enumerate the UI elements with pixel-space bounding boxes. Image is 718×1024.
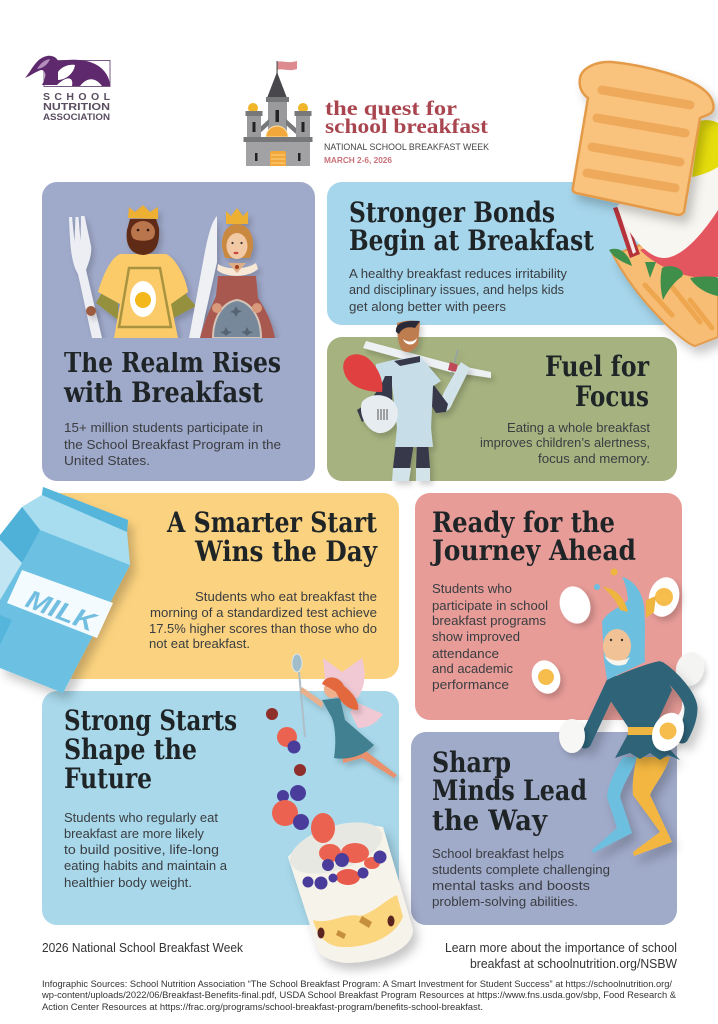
footer: sources: Infographic Sources: School Nutrition Association “The School Breakfast Program: A Smart Investment for Student Success” at https://schoolnutrition.org/: [42, 979, 672, 990]
illustration: king and queen with fork and knife: [60, 205, 282, 352]
text: smarter body: [149, 589, 377, 651]
text: journey body: participate in school: [432, 598, 548, 613]
text: journey body: Students who: [432, 581, 512, 596]
top toast: [573, 62, 713, 215]
text: stronger bonds body: [349, 266, 568, 314]
illustration: toast sandwich: [573, 62, 718, 346]
jester hat and face: [594, 568, 656, 680]
text: realm body: United States.: [64, 453, 150, 468]
illustration: falling berries: [266, 708, 335, 843]
text: journey body: breakfast programs: [432, 613, 547, 628]
heading: the realm rises: The Realm Rises: [64, 346, 281, 379]
heading: stronger bonds: Stronger Bonds: [349, 196, 555, 229]
heading: fuel for focus: [545, 350, 650, 413]
heading: fuel for focus: Focus: [575, 380, 649, 413]
text: strong starts body: healthier body weight.: [64, 875, 192, 890]
text: smarter body: Students who eat breakfast the: [195, 589, 377, 604]
footer: left caption: 2026 National School Breakfast Week: [42, 941, 244, 955]
heading: sharp minds: [432, 746, 587, 837]
heading: strong starts: [64, 704, 237, 795]
text: realm body: the School Breakfast Program in the: [64, 437, 281, 452]
jester legs: [592, 757, 672, 856]
text: fuel for focus body: focus and memory.: [538, 451, 650, 466]
text: stronger bonds body: A healthy breakfast reduces irritability: [349, 266, 568, 281]
text: strong starts body: Students who regularly eat: [64, 810, 218, 825]
panel: sharp minds: [411, 732, 677, 925]
title: the quest for school breakfast: MARCH 2-6, 2026: [324, 155, 392, 165]
text: realm body: [64, 420, 281, 468]
text: journey body: performance: [432, 677, 509, 692]
heading: a smarter start: A Smarter Start: [166, 506, 377, 539]
heading: ready for the journey: [429, 506, 636, 567]
heading: the realm rises: [63, 346, 281, 409]
text: smarter body: morning of a standardized test achieve: [150, 605, 377, 620]
text: smarter body: 17.5% higher scores than those who do: [149, 621, 377, 636]
queen: [200, 208, 275, 338]
text: sharp minds body: mental tasks and boosts: [432, 878, 591, 893]
logo: School Nutrition Association: NUTRITION: [43, 101, 110, 113]
panel: a smarter start: [60, 493, 399, 679]
text: fuel for focus body: Eating a whole breakfast: [507, 420, 650, 435]
icon: fork: [69, 216, 102, 338]
text: journey body: and academic: [432, 661, 513, 676]
text: stronger bonds body: and disciplinary issues, and helps kids: [349, 282, 564, 297]
red plume: [343, 354, 382, 392]
illustration: milk carton: [0, 487, 130, 693]
bacon edge: [613, 206, 640, 258]
icon: knife: [189, 216, 217, 338]
milk label: [7, 570, 113, 638]
sword: [363, 341, 491, 378]
footer: learn more: breakfast at schoolnutrition.org/NSBW: [470, 957, 677, 971]
heading: strong starts: Future: [64, 762, 152, 795]
text: strong starts body: eating habits and maintain a: [64, 858, 228, 873]
egg: right: [672, 649, 708, 689]
illustration: fairy with spoon: [292, 654, 397, 778]
knight body: [357, 321, 470, 481]
text: smarter body: not eat breakfast.: [149, 636, 250, 651]
jester body: [585, 661, 691, 760]
text: fuel for focus body: improves children’s alertness,: [480, 435, 650, 450]
text: strong starts body: [64, 810, 228, 890]
heading: ready for the journey: Journey Ahead: [429, 534, 636, 567]
heading: a smarter start: [166, 506, 378, 568]
egg: middle: [527, 656, 565, 698]
text: sharp minds body: [432, 846, 610, 909]
text: strong starts body: breakfast are more likely: [64, 826, 204, 841]
heading: sharp minds: Minds Lead: [432, 774, 587, 807]
footer: sources: [41, 979, 677, 1013]
panel: strong starts: [42, 691, 399, 925]
heading: stronger bonds: [349, 196, 594, 257]
title: the quest for school breakfast: school breakfast: [325, 114, 488, 138]
title: the quest for school breakfast: the quest for: [325, 96, 457, 120]
logo: School Nutrition Association: SCHOOL: [43, 91, 111, 103]
heading: ready for the journey: Ready for the: [432, 506, 615, 539]
heading: fuel for focus: Fuel for: [545, 350, 650, 383]
heading: a smarter start: Wins the Day: [194, 535, 378, 568]
text: stronger bonds body: get along better with peers: [349, 299, 507, 314]
heading: stronger bonds: Begin at Breakfast: [349, 224, 594, 257]
egg white: [617, 124, 718, 258]
text: journey body: [432, 581, 548, 692]
logo: School Nutrition Association: ASSOCIATION: [43, 112, 110, 122]
title: the quest for school breakfast: NATIONAL SCHOOL BREAKFAST WEEK: [324, 142, 490, 153]
illustration: parfait glass: [284, 812, 413, 963]
panel: fuel for focus: [327, 337, 677, 481]
egg: held right: [646, 708, 690, 756]
text: journey body: attendance: [432, 646, 499, 661]
tomato and ham: [640, 195, 718, 278]
footer: learn more: [445, 941, 677, 971]
egg: held left: [559, 719, 585, 753]
heading: sharp minds: the Way: [432, 804, 548, 837]
illustration: jester juggling eggs: [527, 568, 708, 856]
egg: top left: [555, 582, 595, 628]
logo: School Nutrition Association: [25, 56, 111, 122]
text: strong starts body: to build positive, life-long: [64, 842, 219, 857]
panel: ready for the journey: [415, 493, 682, 720]
footer: learn more: Learn more about the importance of school: [445, 941, 677, 955]
heading: strong starts: Strong Starts: [64, 704, 237, 737]
icon: castle: [244, 61, 312, 166]
text: fuel for focus body: [480, 420, 650, 466]
spoon: [299, 672, 305, 737]
text: journey body: show improved: [432, 629, 520, 644]
bottom toast: [613, 245, 718, 346]
title: the quest for school breakfast: [324, 96, 490, 165]
text: sharp minds body: School breakfast helps: [432, 846, 564, 861]
greens: [609, 249, 718, 300]
text: sharp minds body: problem-solving abilities.: [432, 894, 578, 909]
heading: strong starts: Shape the: [64, 733, 197, 766]
panel: the realm rises: [42, 182, 315, 481]
text: sharp minds body: students complete challenging: [432, 862, 610, 877]
heading: the realm rises: with Breakfast: [63, 376, 263, 409]
king: [86, 205, 205, 338]
egg: top right: [644, 574, 684, 620]
panel: stronger bonds: [327, 182, 677, 325]
illustration: milk carton: MILK: [22, 584, 102, 638]
footer: sources: Action Center Resources at https://frac.org/programs/school-breakfast-program/benefits-school-breakfast.: [42, 1002, 483, 1013]
footer: sources: wp-content/uploads/2022/06/Breakfast-Benefits-final.pdf, USDA School Breakfast Program Resources at https://www.fns.usda.gov/sbp, Food Research &: [41, 990, 677, 1001]
wings: [323, 658, 383, 728]
egg yolk: [692, 120, 718, 177]
text: realm body: 15+ million students participate in: [64, 420, 263, 435]
illustration: knight with sword: [343, 321, 491, 481]
heading: sharp minds: Sharp: [432, 746, 511, 779]
